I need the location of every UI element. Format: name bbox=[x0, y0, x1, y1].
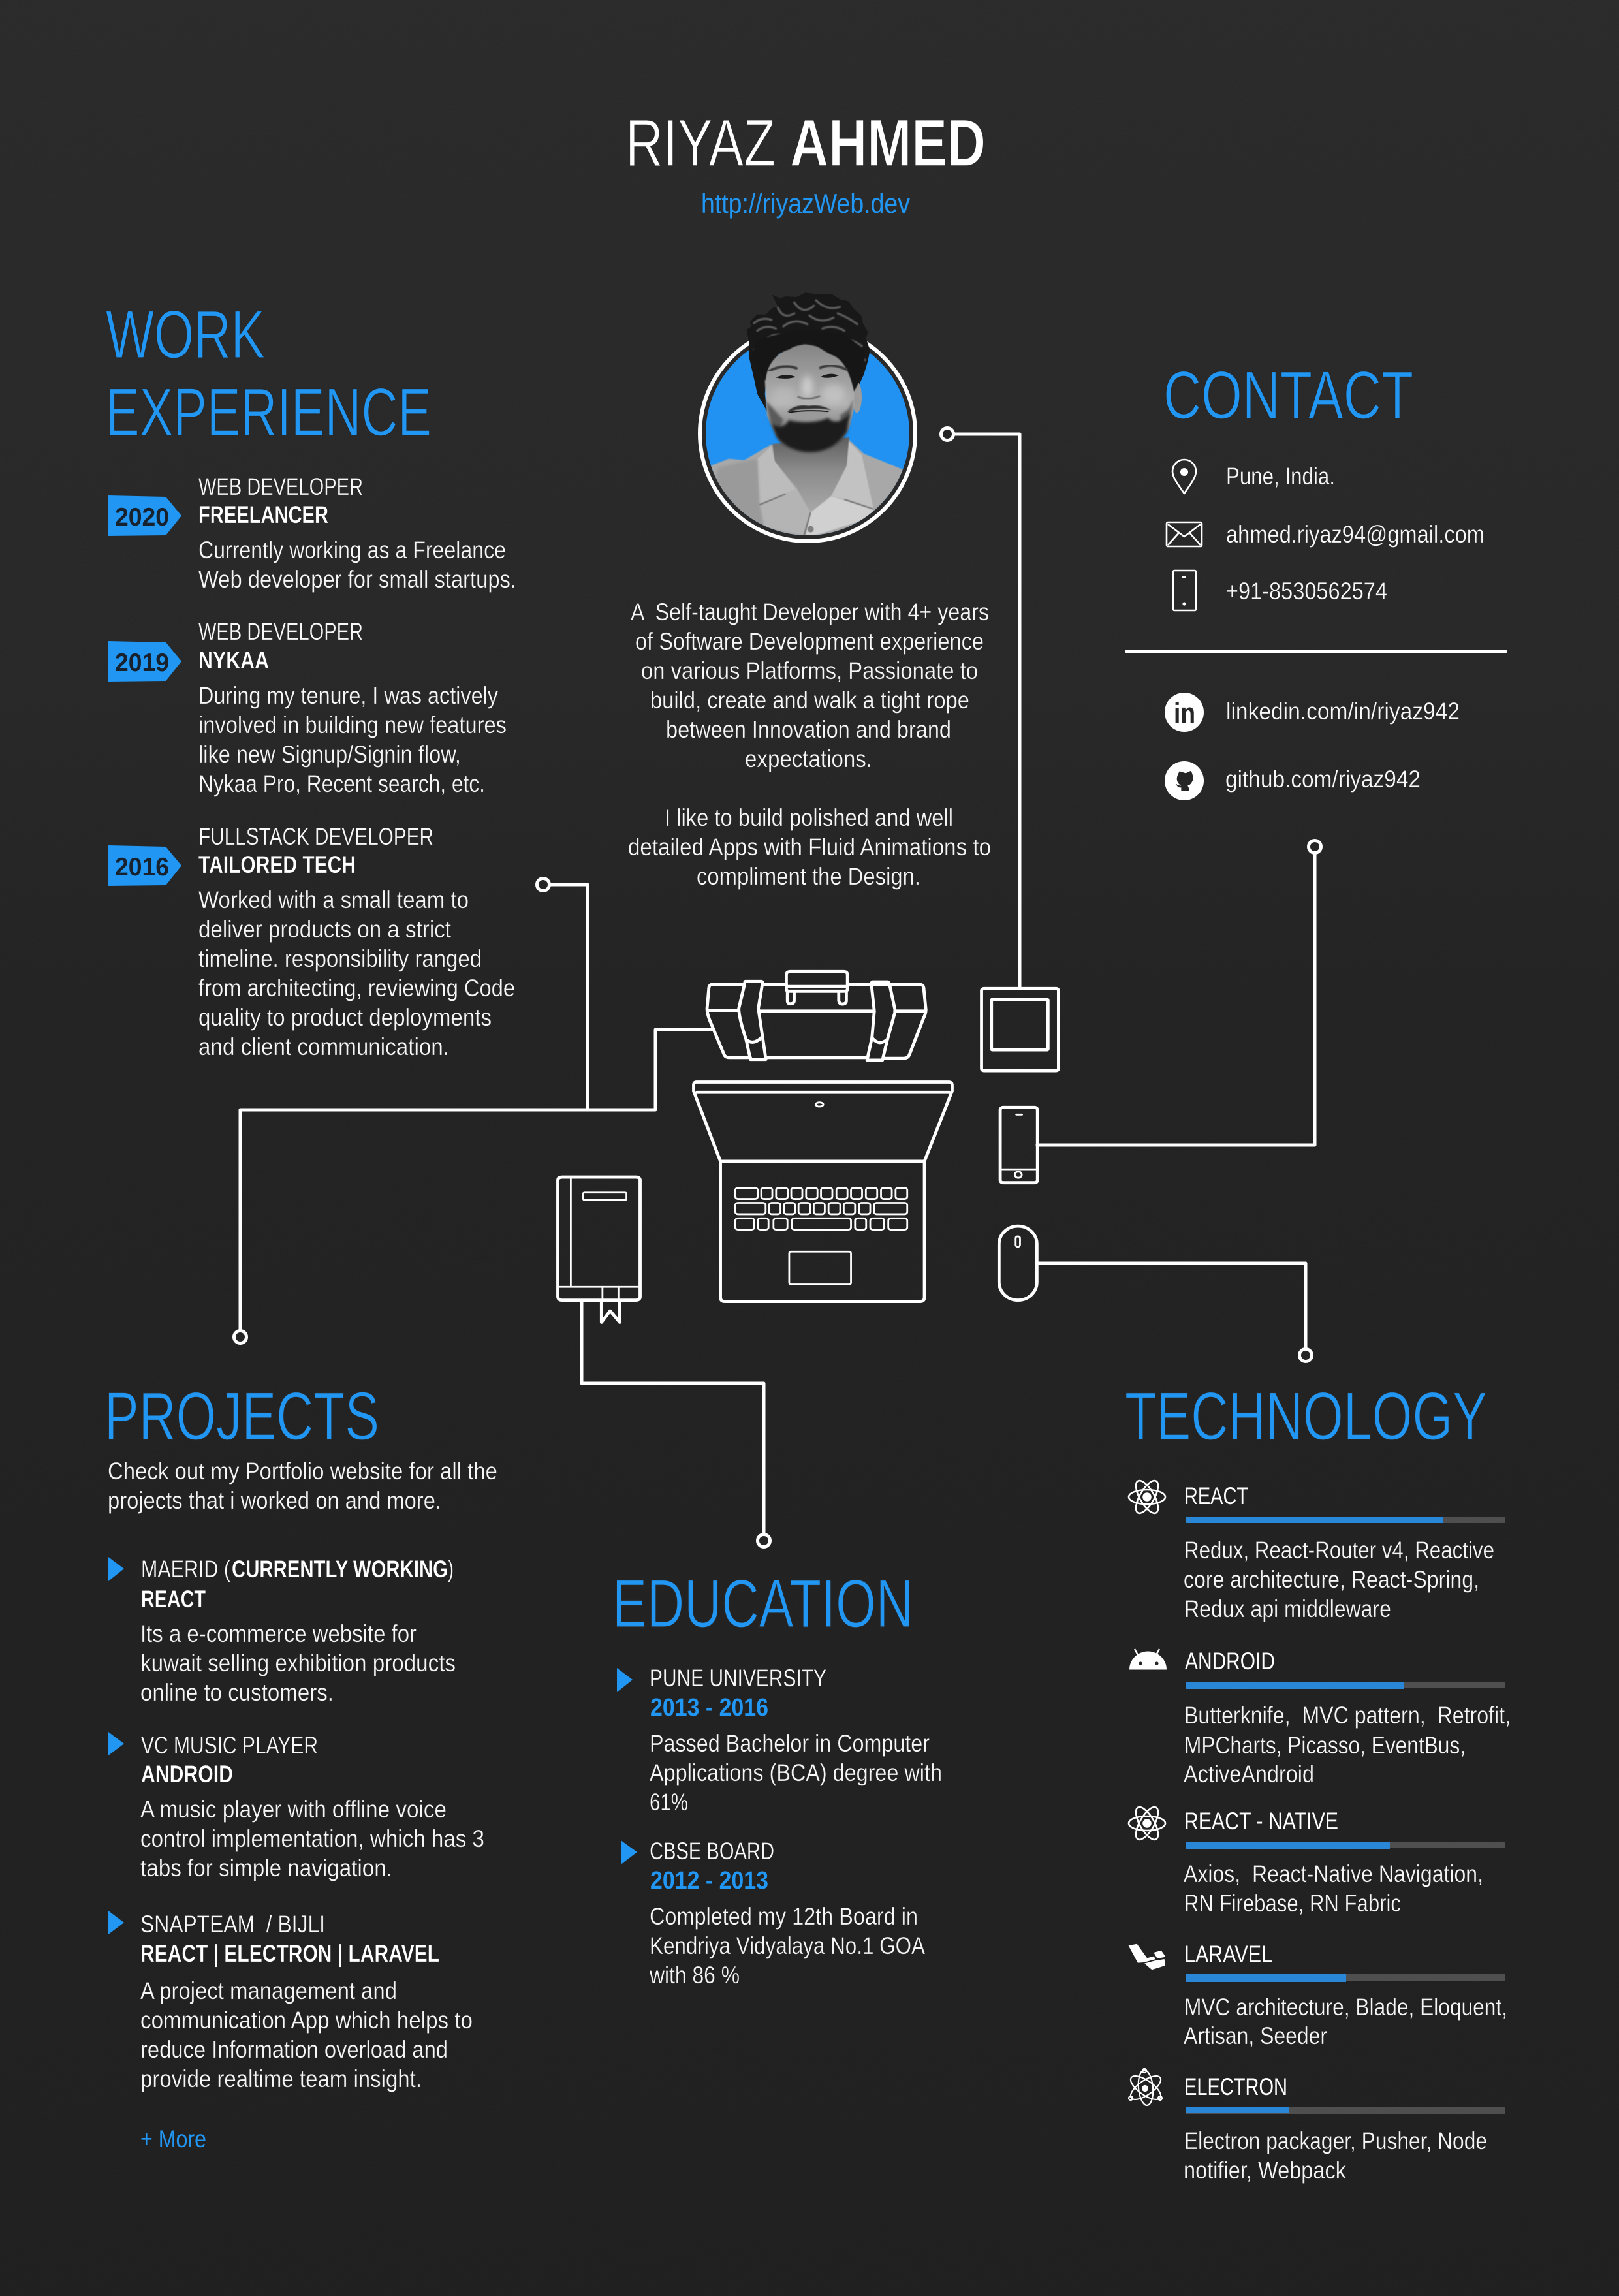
skill bar: react bbox=[1186, 1517, 1505, 1523]
icon: tablet bbox=[982, 988, 1058, 1071]
skill: laravel: LARAVEL bbox=[1184, 1941, 1272, 1968]
skill: android: MPCharts, Picasso, EventBus, bbox=[1184, 1732, 1466, 1759]
connector: mouse to technology bbox=[1037, 1263, 1312, 1362]
job: freelancer 2020: FREELANCER bbox=[198, 501, 328, 528]
project: maerid: ) bbox=[448, 1556, 454, 1582]
entry: pune university: Passed Bachelor in Computer bbox=[650, 1730, 930, 1757]
entry: cbse board: with 86 % bbox=[649, 1962, 740, 1989]
connector: book to education bbox=[582, 1301, 770, 1547]
hair bbox=[746, 292, 870, 411]
skill: electron bbox=[1127, 2069, 1505, 2184]
entry: cbse board bbox=[621, 1838, 925, 1989]
text block: about me: compliment the Design. bbox=[697, 863, 920, 890]
heading: work experience: EXPERIENCE bbox=[106, 375, 432, 450]
project: snapteam bbox=[108, 1911, 473, 2092]
text block: about me bbox=[628, 599, 991, 890]
eyes bbox=[776, 374, 839, 379]
project: snapteam: REACT | ELECTRON | LARAVEL bbox=[140, 1940, 439, 1968]
icon: briefcase bbox=[707, 971, 926, 1060]
entry: pune university: 61% bbox=[650, 1789, 688, 1816]
resume infographic bbox=[106, 120, 1509, 2183]
connector: photo to tablet bbox=[941, 428, 1020, 988]
panel: contact: linkedin.com/in/riyaz942 bbox=[1226, 698, 1460, 725]
hair fringe bbox=[751, 328, 866, 392]
text block: about me: A Self-taught Developer with 4+ years bbox=[631, 599, 989, 625]
project: vc music player: ANDROID bbox=[141, 1761, 233, 1787]
project: maerid: CURRENTLY WORKING bbox=[232, 1556, 448, 1582]
icon: react bbox=[1129, 1477, 1165, 1517]
project: snapteam: SNAPTEAM / BIJLI bbox=[140, 1911, 325, 1938]
panel: contact: +91-8530562574 bbox=[1226, 578, 1387, 605]
project: maerid: online to customers. bbox=[140, 1679, 334, 1706]
job: freelancer 2020: WEB DEVELOPER bbox=[198, 473, 363, 500]
panel: contact: github.com/riyaz942 bbox=[1225, 766, 1421, 793]
icon: location pin bbox=[1172, 460, 1196, 494]
skill: react: core architecture, React-Spring, bbox=[1184, 1566, 1479, 1593]
skill: laravel bbox=[1129, 1941, 1507, 2049]
text block: about me: detailed Apps with Fluid Animations to bbox=[628, 834, 991, 860]
job: nykaa 2019: NYKAA bbox=[198, 647, 269, 674]
project: maerid: REACT bbox=[141, 1586, 206, 1612]
job: tailored tech 2016: TAILORED TECH bbox=[198, 851, 356, 878]
skill: react native: Axios, React-Native Navigation, bbox=[1184, 1861, 1483, 1887]
entry: pune university: 2013 - 2016 bbox=[650, 1694, 768, 1722]
stubble and beard bbox=[766, 398, 854, 431]
skill bar: laravel bbox=[1186, 1974, 1505, 1982]
text block: projects intro bbox=[108, 1458, 497, 1514]
skill bar: react native bbox=[1186, 1842, 1505, 1849]
entry: cbse board: 2012 - 2013 bbox=[650, 1867, 768, 1895]
icon: laptop bbox=[693, 1082, 952, 1302]
heading: contact: CONTACT bbox=[1163, 358, 1413, 433]
skill: react native: REACT - NATIVE bbox=[1184, 1808, 1338, 1834]
skill: laravel: Artisan, Seeder bbox=[1184, 2022, 1327, 2049]
icon: linkedin bbox=[1165, 693, 1204, 732]
heading: education: EDUCATION bbox=[612, 1566, 913, 1642]
panel: contact: ahmed.riyaz94@gmail.com bbox=[1226, 521, 1485, 548]
skill: android: ActiveAndroid bbox=[1184, 1761, 1314, 1787]
project: snapteam: reduce Information overload and bbox=[140, 2036, 448, 2063]
project: vc music player: A music player with offline voice bbox=[140, 1796, 447, 1823]
text block: about me: I like to build polished and well bbox=[665, 804, 953, 831]
skill: react: Redux api middleware bbox=[1184, 1596, 1391, 1622]
skill bar: electron bbox=[1186, 2107, 1505, 2114]
icon: linkedin: in bbox=[1174, 697, 1195, 729]
skill: android: Butterknife, MVC pattern, Retrofit, bbox=[1184, 1702, 1511, 1729]
connector: phone to contact bbox=[1037, 841, 1321, 1145]
text block: about me: on various Platforms, Passionate to bbox=[641, 657, 978, 684]
heading: work experience bbox=[106, 297, 432, 450]
text block: projects intro: Check out my Portfolio website for all the bbox=[108, 1458, 497, 1485]
project: snapteam: A project management and bbox=[140, 1977, 397, 2004]
face bbox=[765, 344, 855, 452]
skill: react native bbox=[1129, 1804, 1505, 1917]
project: snapteam: provide realtime team insight. bbox=[140, 2066, 422, 2092]
year badge 2019 bbox=[108, 641, 181, 682]
skill: laravel: MVC architecture, Blade, Eloquent, bbox=[1184, 1994, 1507, 2021]
icon: react native bbox=[1129, 1804, 1165, 1843]
year badge 2020: 2020 bbox=[115, 503, 169, 531]
job: nykaa 2019: like new Signup/Signin flow, bbox=[198, 741, 461, 768]
ear bbox=[852, 381, 862, 413]
icon: mouse bbox=[999, 1226, 1037, 1300]
job: nykaa 2019: During my tenure, I was actively bbox=[198, 682, 498, 709]
job: tailored tech 2016: FULLSTACK DEVELOPER bbox=[198, 823, 433, 850]
entry: cbse board: CBSE BOARD bbox=[650, 1838, 774, 1864]
icon: electron bbox=[1127, 2069, 1164, 2106]
panel: projects bbox=[104, 1379, 497, 2152]
project: vc music player bbox=[108, 1732, 484, 1881]
entry: pune university: PUNE UNIVERSITY bbox=[650, 1665, 826, 1691]
text block: about me: between Innovation and brand bbox=[666, 716, 951, 743]
panel: technology bbox=[1125, 1379, 1511, 2184]
entry: cbse board: Completed my 12th Board in bbox=[650, 1903, 918, 1930]
icon: phone bbox=[1173, 571, 1196, 610]
skill: electron: Electron packager, Pusher, Node bbox=[1184, 2128, 1487, 2154]
job: tailored tech 2016: Worked with a small team to bbox=[198, 887, 469, 913]
job: tailored tech 2016: quality to product deployments bbox=[198, 1004, 492, 1031]
entry: pune university: Applications (BCA) degree with bbox=[650, 1759, 942, 1786]
panel: contact: Pune, India. bbox=[1226, 463, 1335, 490]
text block: about me: expectations. bbox=[745, 746, 872, 772]
portrait photo in ring bbox=[700, 292, 915, 548]
icon: github bbox=[1165, 761, 1204, 800]
icon: laravel bbox=[1129, 1944, 1166, 1970]
title: name bbox=[625, 106, 986, 180]
job: freelancer 2020: Web developer for small startups. bbox=[198, 566, 516, 593]
job: tailored tech 2016: timeline. responsibility ranged bbox=[198, 945, 482, 972]
job: freelancer 2020: Currently working as a Freelance bbox=[198, 537, 506, 563]
job: tailored tech 2016 bbox=[108, 823, 515, 1060]
project: vc music player: VC MUSIC PLAYER bbox=[141, 1732, 318, 1759]
link: more: + More bbox=[140, 2126, 206, 2152]
project: vc music player: tabs for simple navigation. bbox=[140, 1855, 392, 1881]
entry: cbse board: Kendriya Vidyalaya No.1 GOA bbox=[650, 1932, 925, 1959]
icon: smartphone bbox=[1000, 1107, 1037, 1183]
project: snapteam: communication App which helps to bbox=[140, 2007, 473, 2034]
skill: react bbox=[1129, 1477, 1505, 1622]
skill: electron: notifier, Webpack bbox=[1184, 2157, 1346, 2184]
icon: book bbox=[558, 1177, 640, 1323]
text block: about me: build, create and walk a tight rope bbox=[650, 687, 969, 714]
text block: projects intro: projects that i worked on and more. bbox=[108, 1487, 441, 1514]
skill: android bbox=[1129, 1648, 1511, 1787]
job: tailored tech 2016: and client communication. bbox=[198, 1033, 449, 1060]
project: maerid: MAERID ( bbox=[141, 1556, 231, 1582]
panel: contact bbox=[1126, 358, 1506, 800]
job: nykaa 2019: Nykaa Pro, Recent search, etc. bbox=[198, 770, 485, 797]
job: nykaa 2019 bbox=[108, 618, 507, 797]
panel: education bbox=[612, 1566, 942, 1989]
shirt bbox=[710, 437, 903, 535]
job: tailored tech 2016: deliver products on a strict bbox=[198, 916, 452, 943]
heading: work experience: WORK bbox=[106, 297, 265, 373]
year badge 2020 bbox=[108, 495, 181, 536]
job: tailored tech 2016: from architecting, reviewing Code bbox=[198, 975, 515, 1001]
skill: electron: ELECTRON bbox=[1184, 2073, 1287, 2100]
skill: react: REACT bbox=[1184, 1483, 1248, 1509]
skill: android: ANDROID bbox=[1185, 1648, 1275, 1675]
project: vc music player: control implementation, which has 3 bbox=[140, 1825, 484, 1852]
job: nykaa 2019: WEB DEVELOPER bbox=[198, 618, 363, 645]
year badge 2019: 2019 bbox=[115, 649, 169, 677]
job: freelancer 2020 bbox=[108, 473, 516, 593]
title: name: AHMED bbox=[790, 106, 986, 180]
skill: react: Redux, React-Router v4, Reactive bbox=[1184, 1537, 1494, 1564]
skill: react native: RN Firebase, RN Fabric bbox=[1184, 1890, 1401, 1917]
heading: technology: TECHNOLOGY bbox=[1125, 1379, 1487, 1455]
year badge 2016 bbox=[108, 845, 181, 886]
job: nykaa 2019: involved in building new features bbox=[198, 712, 507, 738]
text block: about me: of Software Development experience bbox=[635, 628, 984, 655]
title: name: RIYAZ bbox=[625, 106, 776, 180]
skill bar: android bbox=[1186, 1682, 1505, 1689]
entry: pune university bbox=[617, 1665, 942, 1816]
icon: envelope bbox=[1167, 522, 1202, 546]
heading: projects: PROJECTS bbox=[104, 1379, 379, 1455]
connector: briefcase to projects and work bbox=[234, 879, 712, 1344]
website link: http://riyazWeb.dev bbox=[701, 188, 910, 219]
project: maerid: Its a e-commerce website for bbox=[140, 1620, 417, 1647]
project: maerid: kuwait selling exhibition products bbox=[140, 1650, 456, 1676]
icon: android bbox=[1129, 1649, 1167, 1670]
project: maerid bbox=[108, 1556, 456, 1706]
panel: work experience bbox=[106, 297, 516, 1060]
year badge 2016: 2016 bbox=[115, 853, 169, 881]
